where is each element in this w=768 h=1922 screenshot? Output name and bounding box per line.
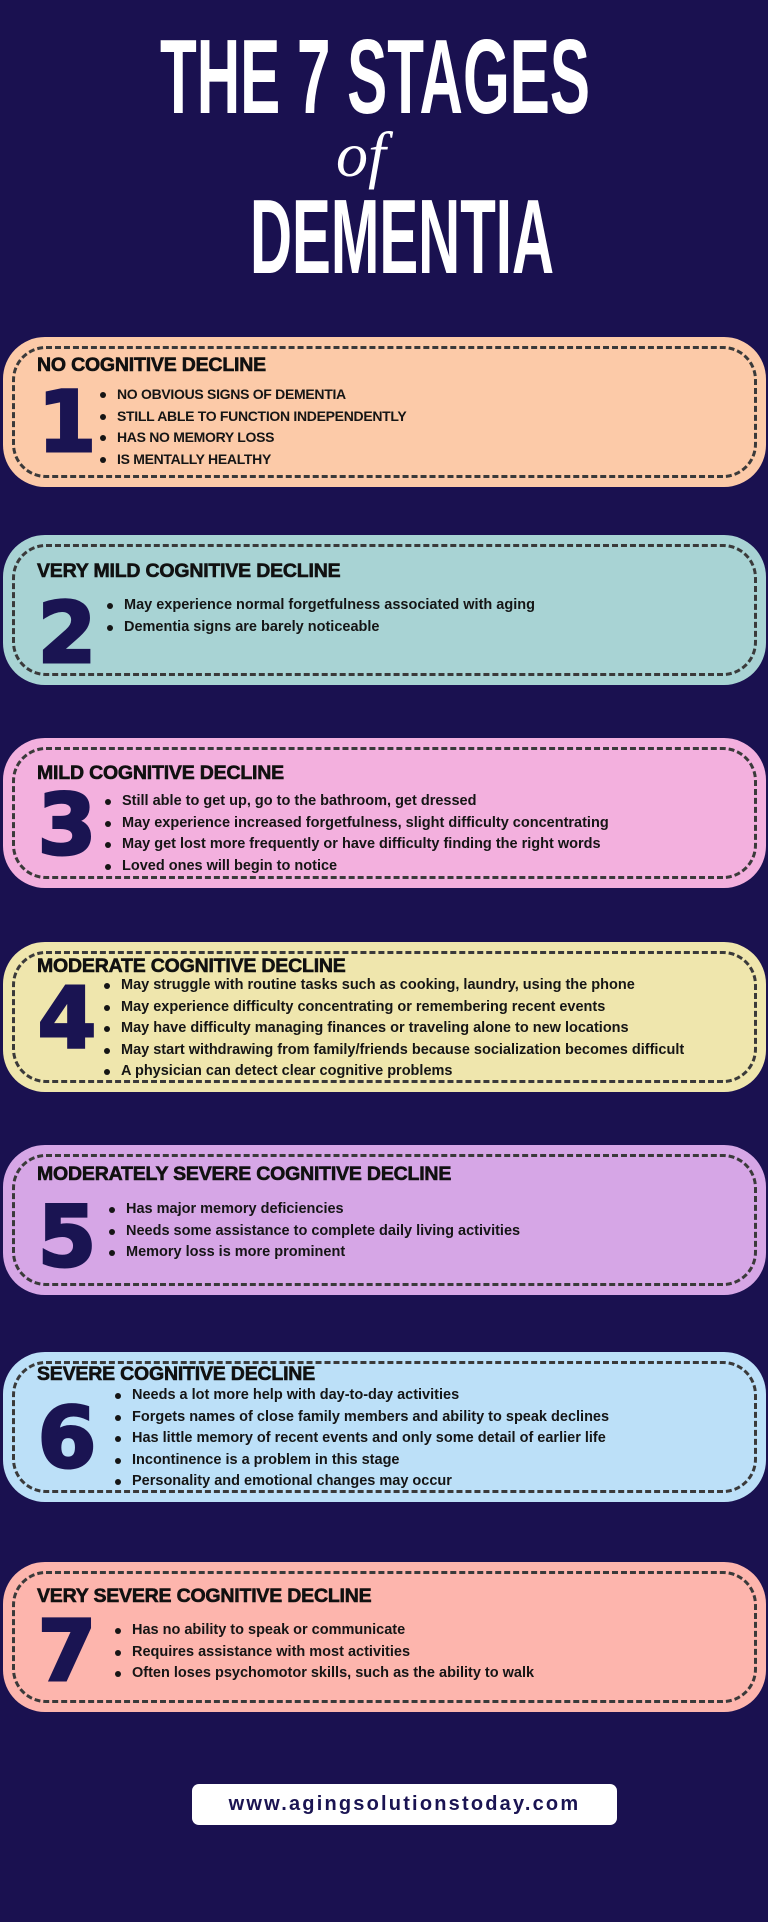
bullets 6: Personality and emotional changes may occur [132,1473,452,1489]
number 5: 5 [38,1188,96,1286]
panel: stage 3 [3,738,766,888]
bullets 3: Still able to get up, go to the bathroom, get dressed [122,793,476,809]
bullets 2 [107,597,535,634]
panel: stage 1 [3,337,766,487]
bullets 5 [109,1201,520,1260]
bullets 6 [115,1387,609,1489]
bullets 1 [100,386,406,466]
panel: stage 6 [3,1352,766,1502]
bullets 3: Loved ones will begin to notice [122,858,337,874]
bullets 2: Dementia signs are barely noticeable [124,618,379,634]
bullets 1: STILL ABLE TO FUNCTION INDEPENDENTLY [117,408,406,424]
website url: www.agingsolutionstoday.com [229,1793,580,1815]
title: of [336,119,394,190]
bullets 7: Requires assistance with most activities [132,1644,410,1660]
heading 3: MILD COGNITIVE DECLINE [37,762,284,784]
bullets 6: Has little memory of recent events and only some detail of earlier life [132,1430,606,1446]
bullets 6: Incontinence is a problem in this stage [132,1452,400,1468]
panel: stage 5 [3,1145,766,1295]
panel: stage 7 [3,1562,766,1712]
number 2: 2 [38,584,96,682]
bullets 1: NO OBVIOUS SIGNS OF DEMENTIA [117,386,346,402]
number 1: 1 [38,373,96,471]
bullets 1: IS MENTALLY HEALTHY [117,450,271,466]
bullets 4: A physician can detect clear cognitive problems [121,1063,452,1079]
heading 6: SEVERE COGNITIVE DECLINE [37,1363,315,1385]
bullets 3: May experience increased forgetfulness, slight difficulty concentrating [122,814,609,830]
bullets 4: May start withdrawing from family/friends because socialization becomes difficult [121,1042,684,1058]
heading 5: MODERATELY SEVERE COGNITIVE DECLINE [37,1163,451,1185]
bullets 3: May get lost more frequently or have difficulty finding the right words [122,836,601,852]
number 3: 3 [38,776,96,874]
heading 1: NO COGNITIVE DECLINE [37,354,266,376]
bullets 7 [115,1622,534,1681]
heading 7: VERY SEVERE COGNITIVE DECLINE [37,1585,371,1607]
heading 2: VERY MILD COGNITIVE DECLINE [37,560,340,582]
bullets 3 [105,793,609,874]
bullets 2: May experience normal forgetfulness associated with aging [124,597,535,613]
title [160,18,590,296]
number 4: 4 [38,969,96,1067]
panel: stage 4 [3,942,766,1092]
bullets 6: Needs a lot more help with day-to-day activities [132,1387,459,1403]
bullets 5: Needs some assistance to complete daily living activities [126,1222,520,1238]
bullets 1: HAS NO MEMORY LOSS [117,429,274,445]
bullets 6: Forgets names of close family members and ability to speak declines [132,1408,609,1424]
bullets 7: Has no ability to speak or communicate [132,1622,405,1638]
bullets 4: May struggle with routine tasks such as cooking, laundry, using the phone [121,977,635,993]
bullets 4: May experience difficulty concentrating or remembering recent events [121,998,605,1014]
number 7: 7 [38,1602,96,1700]
heading 4: MODERATE COGNITIVE DECLINE [37,955,346,977]
number 6: 6 [38,1389,96,1487]
bullets 5: Has major memory deficiencies [126,1201,344,1217]
website url [192,1784,617,1825]
bullets 7: Often loses psychomotor skills, such as the ability to walk [132,1665,534,1681]
bullets 4: May have difficulty managing finances or traveling alone to new locations [121,1020,629,1036]
bullets 4 [104,977,684,1079]
bullets 5: Memory loss is more prominent [126,1244,345,1260]
panel: stage 2 [3,535,766,685]
